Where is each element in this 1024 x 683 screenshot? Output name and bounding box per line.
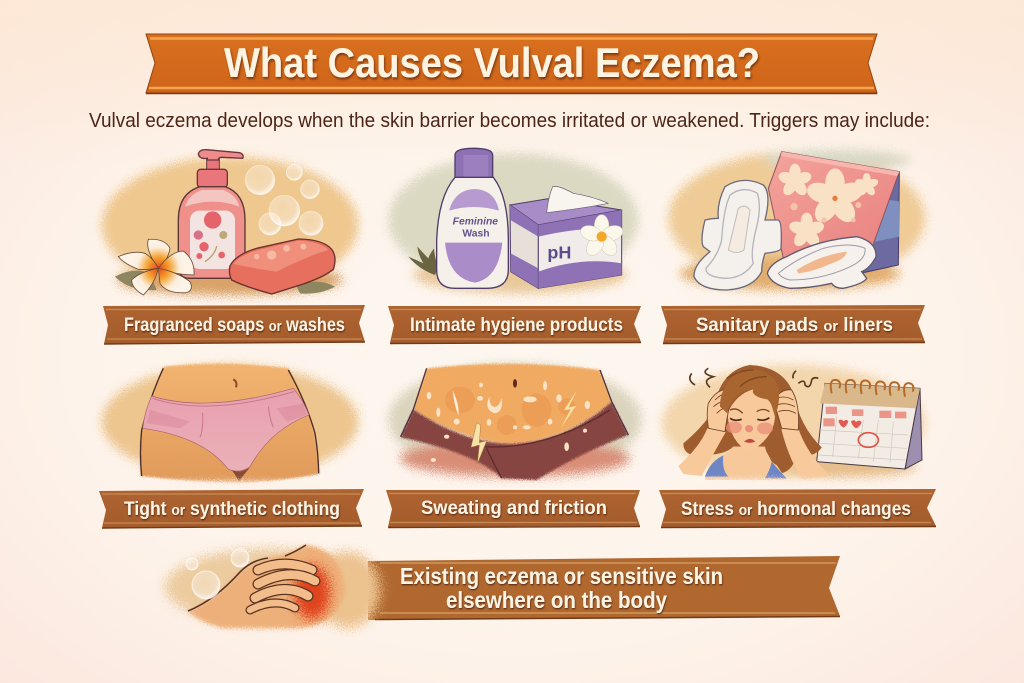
background wash — [388, 153, 638, 293]
maroon briefs — [401, 402, 628, 480]
plumeria flower — [118, 239, 194, 295]
top and chest — [705, 447, 787, 480]
calendar — [817, 380, 922, 469]
label ribbon: fragranced soaps: Fragranced soaps or washes — [124, 315, 345, 336]
daisy — [578, 215, 625, 259]
label ribbon: sanitary pads — [661, 305, 925, 344]
panel: sanitary pads or liners — [661, 150, 925, 344]
label ribbon: tight clothing — [99, 489, 364, 528]
background wash — [662, 365, 925, 482]
label ribbon: intimate hygiene: Intimate hygiene products — [410, 315, 623, 336]
ribbon text: elsewhere on the body — [446, 587, 667, 613]
hair top — [720, 370, 779, 417]
title banner: What Causes Vulval Eczema? — [224, 39, 760, 86]
panel: intimate hygiene products — [388, 148, 641, 344]
feminine wash bottle: Feminine — [453, 216, 498, 227]
sweat droplets — [427, 381, 590, 462]
label ribbon: intimate hygiene — [388, 306, 641, 344]
label ribbon: tight clothing: Tight or synthetic clothing — [124, 499, 340, 520]
panel: fragranced soaps or washes — [102, 150, 365, 344]
fingers — [250, 564, 315, 610]
pH label: pH — [547, 242, 571, 262]
left arm and hand — [678, 389, 731, 476]
tissue box — [510, 186, 625, 288]
background wash — [388, 363, 642, 477]
soap bar — [229, 239, 335, 294]
panel: sweating and friction — [386, 363, 642, 528]
rash patches — [445, 387, 575, 435]
intro sentence: Vulval eczema develops when the skin barrier becomes irritated or weakened. Triggers may include: — [89, 110, 930, 132]
forearm and hand — [188, 545, 345, 628]
pink briefs — [143, 388, 309, 471]
label ribbon: sanitary pads: Sanitary pads or liners — [696, 315, 893, 336]
feminine wash bottle: Wash — [462, 229, 490, 240]
background wash — [102, 157, 358, 295]
ribbon text: Existing eczema or sensitive skin — [400, 563, 723, 589]
label ribbon: stress — [659, 489, 936, 528]
lightning bolt centre — [471, 423, 487, 464]
leaves — [115, 271, 335, 294]
torso skin — [413, 364, 612, 443]
ribbon — [368, 556, 840, 620]
navel — [233, 379, 236, 387]
label ribbon: sweating: Sweating and friction — [421, 498, 607, 519]
stress squiggles — [690, 368, 818, 387]
background wash — [102, 365, 358, 478]
pad package — [768, 152, 899, 273]
background wash — [668, 150, 925, 290]
torso skin — [140, 364, 319, 483]
background wash — [165, 549, 375, 625]
navel — [513, 379, 517, 388]
crescent mark — [487, 397, 502, 413]
lightning bolt right — [561, 391, 577, 428]
title banner — [146, 34, 877, 94]
face — [726, 389, 775, 452]
label ribbon: sweating — [386, 490, 640, 528]
hair back — [683, 365, 822, 473]
plant — [408, 247, 438, 275]
soap bubbles — [245, 164, 323, 235]
ribbon fade into illustration — [316, 552, 380, 628]
winged pad — [694, 180, 781, 290]
speckled fade at legs — [123, 481, 337, 493]
red rash — [294, 565, 330, 619]
side outlines — [401, 368, 628, 437]
friction sparks — [453, 390, 459, 415]
label ribbon: fragranced soaps — [103, 305, 365, 344]
panel: stress or hormonal changes — [659, 365, 936, 528]
label ribbon: stress: Stress or hormonal changes — [681, 499, 911, 520]
folded liner — [767, 237, 876, 288]
body outline — [140, 368, 319, 476]
feminine wash bottle — [437, 148, 508, 288]
panel: tight or synthetic clothing — [99, 364, 364, 528]
panel: existing eczema or sensitive skin — [165, 545, 840, 628]
soap bottle — [178, 150, 245, 278]
speckled fade at shoulders — [670, 480, 843, 490]
arm outline — [188, 545, 306, 611]
bubbles — [186, 549, 249, 599]
right arm and hand — [773, 390, 829, 479]
